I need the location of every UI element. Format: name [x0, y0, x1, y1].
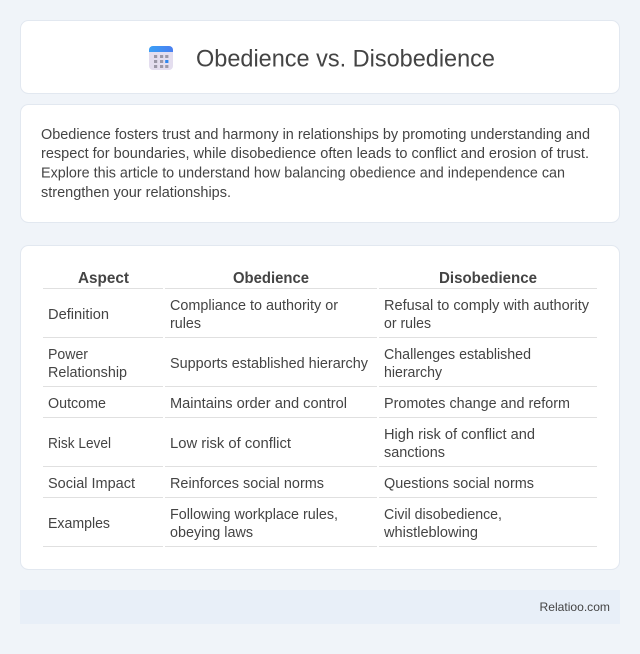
table row: risk level: Risk Level: [48, 436, 111, 452]
text block: introduction paragraph: respect for boundaries, while disobedience often leads to conflict and erosion of trust.: [41, 146, 589, 162]
text block: introduction paragraph: strengthen your relationships.: [41, 185, 231, 201]
icon: calendar: [149, 46, 173, 70]
table header row: [78, 270, 537, 287]
table row: definition: Definition: [48, 307, 109, 323]
text block: introduction paragraph: [41, 127, 590, 201]
table row: social impact: Questions social norms: [384, 476, 534, 492]
table row: power relationship: [48, 347, 531, 381]
table row: examples: Examples: [48, 516, 110, 532]
footer bar: [20, 590, 620, 624]
table row: social impact: Social Impact: [48, 476, 135, 492]
table header row: Obedience: [233, 270, 309, 287]
table row: examples: [48, 507, 502, 541]
table row: outcome: Outcome: [48, 396, 106, 412]
table row: social impact: Reinforces social norms: [170, 476, 324, 492]
table row: risk level: Low risk of conflict: [170, 436, 291, 452]
table row: outcome: Maintains order and control: [170, 396, 347, 412]
table row: examples: Civil disobedience,: [384, 507, 502, 523]
table row: examples: whistleblowing: [383, 525, 478, 541]
table header row: Disobedience: [439, 270, 537, 287]
table row: definition: or rules: [384, 316, 431, 332]
table row: definition: Refusal to comply with authority: [384, 298, 590, 314]
panel: comparison table: [20, 246, 620, 570]
panel: title header: [20, 20, 620, 94]
table row: power relationship: Relationship: [48, 365, 127, 381]
table row: outcome: [48, 396, 570, 412]
text block: introduction paragraph: Explore this article to understand how balancing obedience and independence can: [41, 166, 565, 182]
title: Obedience vs. Disobedience: [196, 46, 495, 72]
table row: outcome: Promotes change and reform: [384, 396, 570, 412]
footer source text: Relatioo.com: [540, 600, 610, 614]
panel: introduction: [20, 104, 620, 222]
table row: examples: obeying laws: [170, 525, 253, 541]
table row: risk level: High risk of conflict and: [384, 427, 535, 443]
table row: risk level: [48, 427, 535, 461]
table row: examples: Following workplace rules,: [170, 507, 338, 523]
table row: power relationship: hierarchy: [384, 365, 443, 381]
table row: risk level: sanctions: [384, 445, 445, 461]
table row: power relationship: Challenges established: [384, 347, 531, 363]
table row: power relationship: Power: [48, 347, 88, 363]
table row: definition: Compliance to authority or: [170, 298, 338, 314]
text block: introduction paragraph: Obedience fosters trust and harmony in relationships by promoting understanding and: [41, 127, 590, 143]
table row: social impact: [48, 476, 534, 492]
table row: power relationship: Supports established hierarchy: [170, 356, 369, 372]
table row: definition: [48, 298, 590, 332]
table row: definition: rules: [170, 316, 201, 332]
table header row: Aspect: [78, 270, 130, 287]
